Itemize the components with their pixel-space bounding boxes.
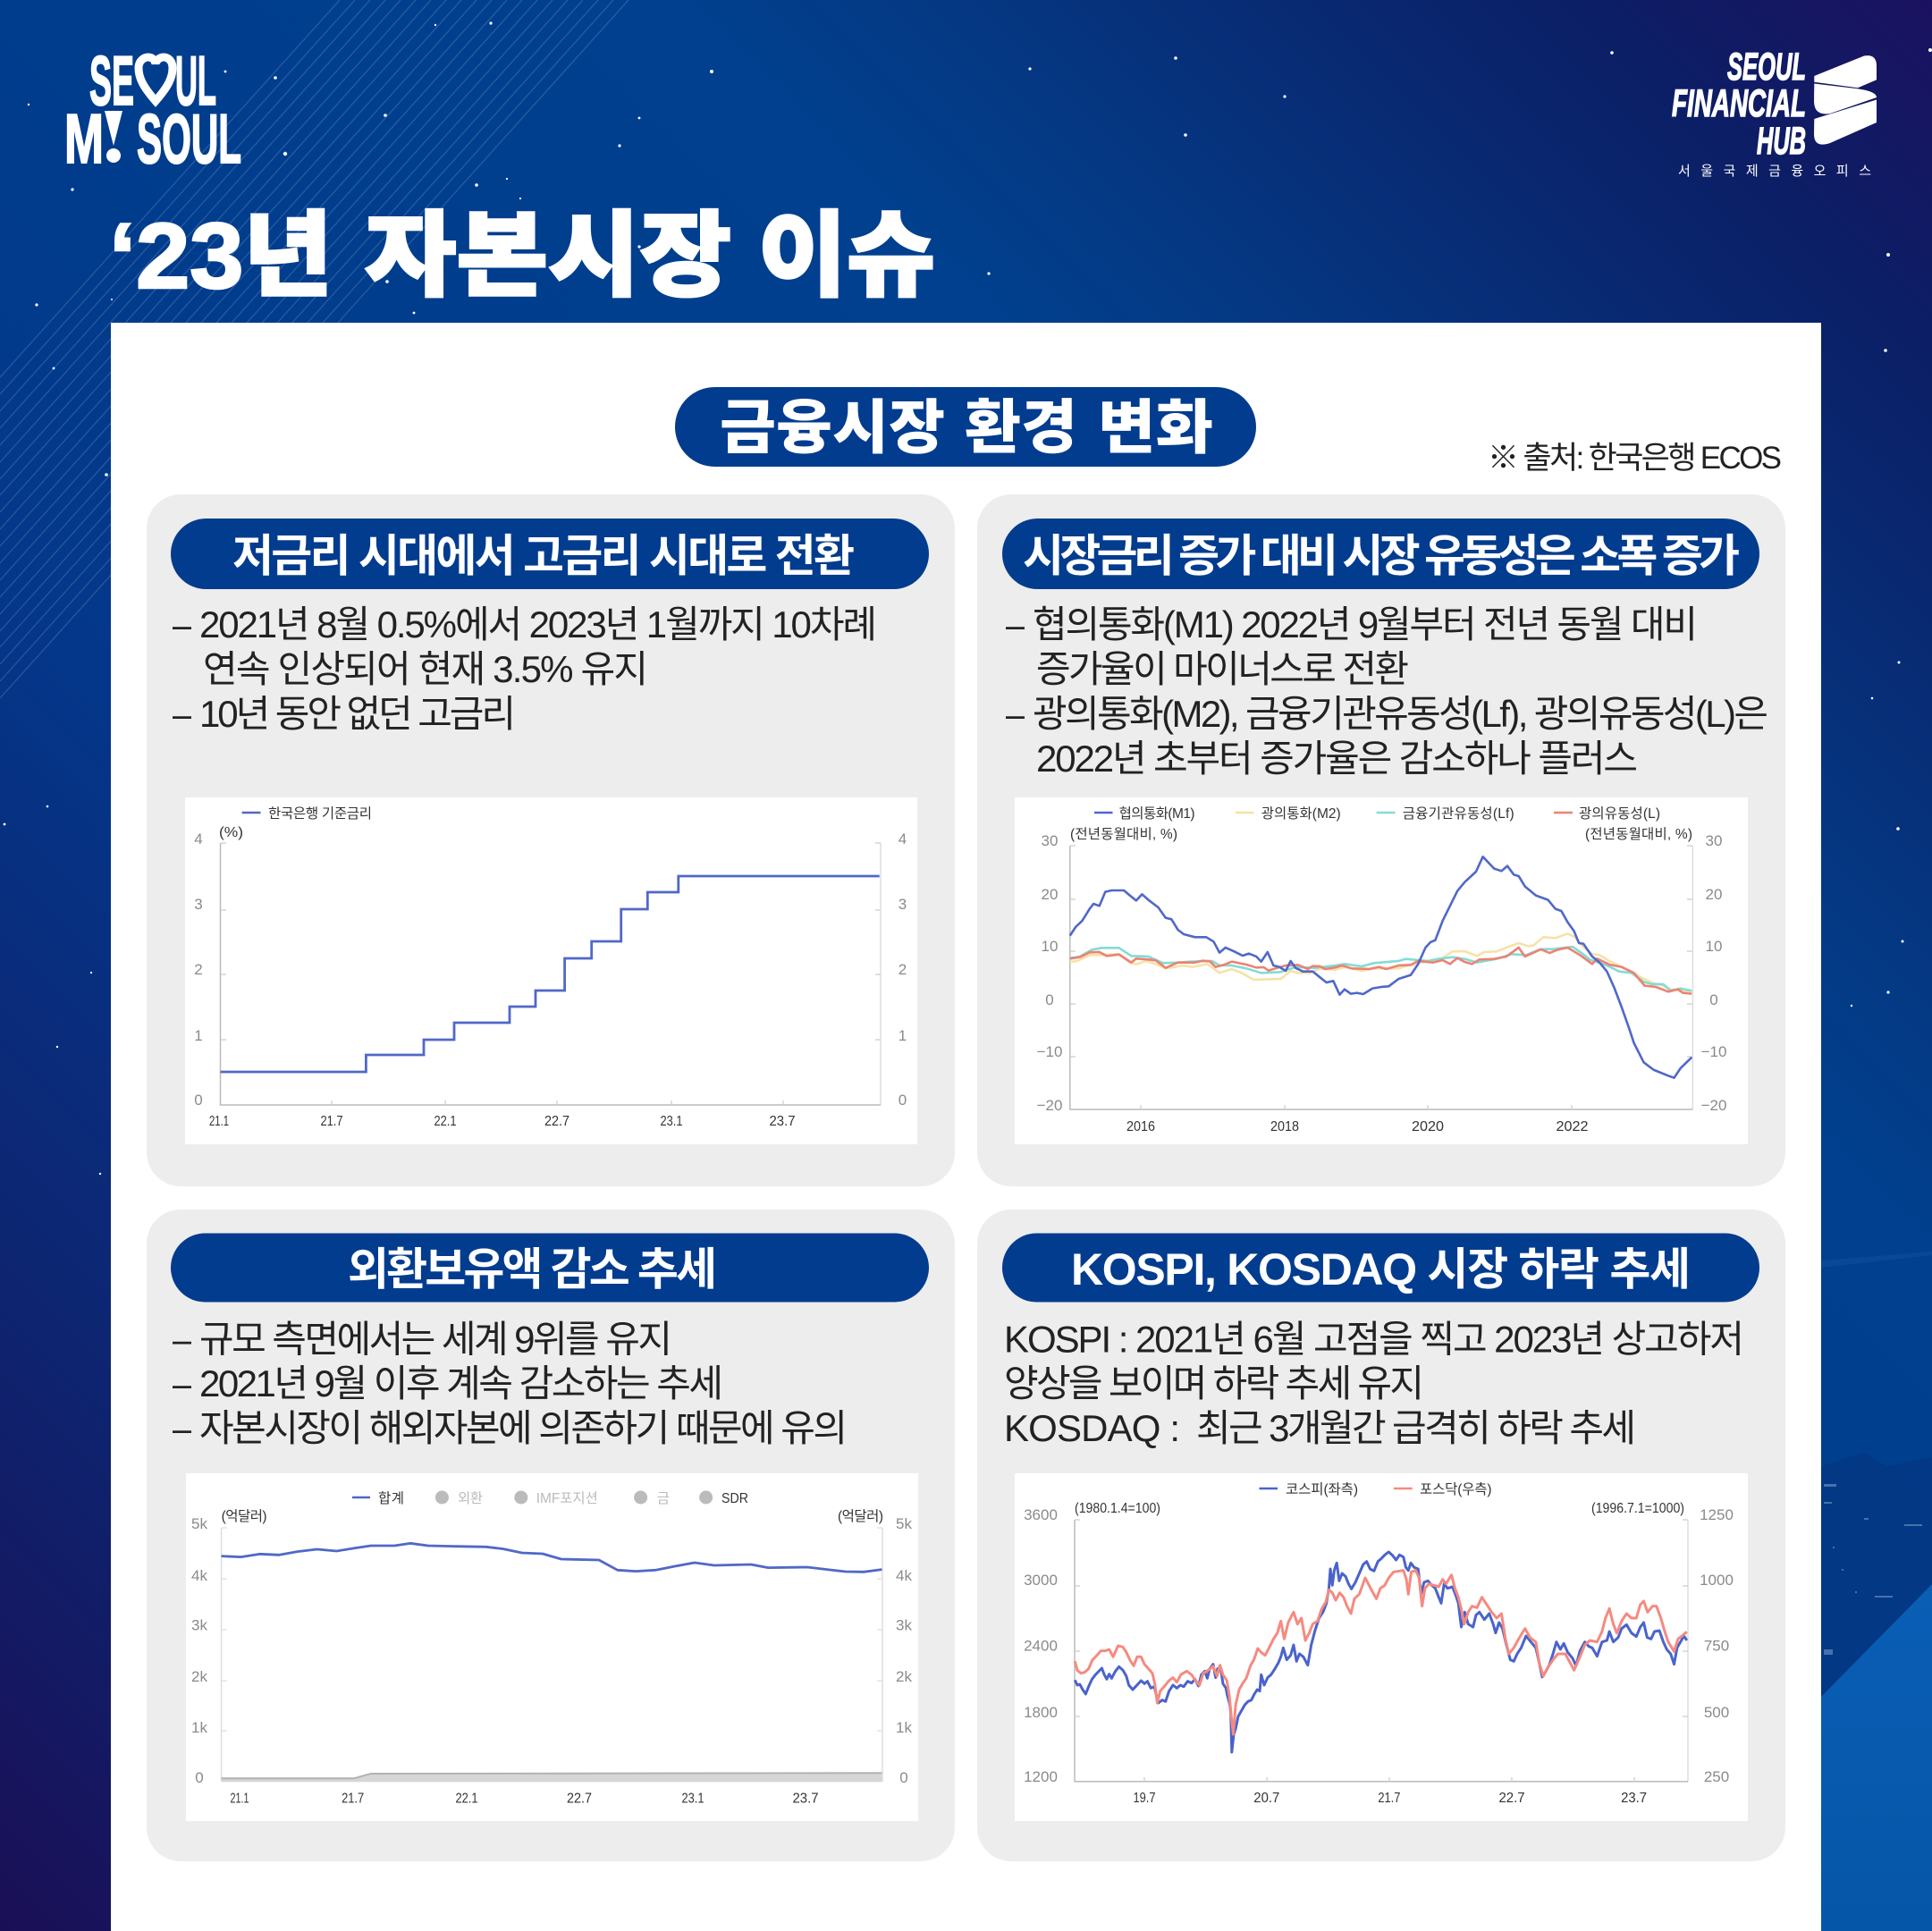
panel text: 양상을 보이며 하락 추세 유지 <box>1004 1362 1424 1404</box>
legend: 한국은행 기준금리 <box>268 805 372 822</box>
panel text <box>173 1318 848 1449</box>
logo: Seoul Financial Hub <box>1672 46 1877 179</box>
panel text <box>1004 1318 1744 1449</box>
legend: 금융기관유동성(Lf) <box>1403 805 1514 822</box>
panel: foreign reserves <box>147 1210 955 1861</box>
panel text: 연속 인상되어 현재 3.5% 유지 <box>203 648 648 690</box>
logo: Seoul Financial Hub: FINANCIAL <box>1672 82 1806 125</box>
chart: reserves: 5k <box>896 1515 912 1532</box>
panel text: – <box>1006 603 1025 645</box>
section heading pill: 환경 <box>965 394 1077 460</box>
section heading pill <box>675 387 1256 467</box>
chart: base rate: 4 <box>194 831 203 847</box>
chart: base rate <box>185 797 917 1144</box>
chart: stock indices: 1000 <box>1700 1572 1734 1589</box>
panel: KOSPI KOSDAQ <box>977 1210 1785 1861</box>
panel text: 증가율이 마이너스로 전환 <box>1036 648 1409 690</box>
chart: reserves: (억달러) <box>222 1508 267 1524</box>
chart: money supply growth: 2016 <box>1126 1119 1155 1134</box>
source note: ※ 출처: 한국은행 ECOS <box>1488 441 1782 476</box>
chart: base rate: 22.1 <box>434 1114 457 1129</box>
panel text: 광의통화(M2), 금융기관유동성(Lf), 광의유동성(L)은 <box>1033 693 1768 735</box>
legend: 코스피(좌측) <box>1286 1481 1358 1497</box>
chart: money supply growth: 10 <box>1706 938 1722 955</box>
chart: money supply growth: 2018 <box>1270 1119 1299 1134</box>
chart: stock indices: 1800 <box>1024 1704 1058 1721</box>
chart: stock indices <box>1015 1473 1748 1821</box>
chart: reserves: 23.1 <box>681 1792 704 1806</box>
chart: money supply growth: (전년동월대비, %) <box>1070 826 1177 842</box>
city night overlay <box>1821 1252 1932 1931</box>
chart: reserves: 2k <box>191 1668 207 1685</box>
chart: stock indices: 1250 <box>1700 1506 1734 1523</box>
chart: base rate: 3 <box>899 896 907 913</box>
chart: base rate: 23.7 <box>769 1114 796 1129</box>
panel text: 협의통화(M1) 2022년 9월부터 전년 동월 대비 <box>1033 603 1698 645</box>
legend: 외환 <box>458 1490 483 1506</box>
panel heading: 저금리 시대에서 고금리 시대로 전환 <box>232 531 855 581</box>
chart: base rate: 21.7 <box>320 1114 343 1129</box>
panel heading: 시장금리 증가 대비 시장 유동성은 소폭 증가 <box>1023 531 1740 581</box>
chart: stock indices: 21.7 <box>1378 1791 1400 1806</box>
chart: stock indices: 500 <box>1704 1704 1729 1721</box>
legend <box>1259 1481 1491 1497</box>
legend <box>352 1490 748 1506</box>
chart: money supply growth: (전년동월대비, %) <box>1585 826 1692 842</box>
chart: base rate: 1 <box>899 1027 907 1044</box>
panel text: 2021년 8월 0.5%에서 2023년 1월까지 10차례 <box>199 603 877 645</box>
legend: 금 <box>657 1491 670 1506</box>
panel text: 규모 측면에서는 세계 9위를 유지 <box>199 1318 672 1361</box>
legend: 협의통화(M1) <box>1119 805 1195 822</box>
chart: stock indices: 20.7 <box>1253 1791 1279 1806</box>
panel text: KOSPI : 2021년 6월 고점을 찍고 2023년 상고하저 <box>1004 1318 1744 1361</box>
chart: money supply growth: 10 <box>1042 938 1058 955</box>
title: 자본시장 <box>365 205 731 308</box>
chart: money supply growth: −20 <box>1701 1097 1726 1114</box>
panel: market liquidity <box>977 494 1785 1186</box>
chart: reserves: 21.1 <box>231 1792 249 1806</box>
panel text: – <box>173 1362 192 1404</box>
chart: stock indices: (1996.7.1=1000) <box>1591 1501 1684 1516</box>
legend <box>1094 805 1660 822</box>
logo: Seoul Financial Hub: HUB <box>1757 120 1806 163</box>
chart: reserves: 21.7 <box>342 1792 364 1806</box>
chart: reserves: 5k <box>191 1515 207 1532</box>
chart: stock indices: (1980.1.4=100) <box>1075 1501 1160 1516</box>
chart: reserves: 4k <box>191 1567 207 1584</box>
chart: reserves: 1k <box>896 1719 912 1736</box>
chart: reserves: (억달러) <box>838 1508 883 1524</box>
chart: reserves: 4k <box>896 1567 912 1584</box>
chart: base rate: 2 <box>899 961 907 978</box>
panel text: 자본시장이 해외자본에 의존하기 때문에 유의 <box>199 1407 848 1449</box>
logo: Seoul My Soul: SE <box>89 41 134 120</box>
chart: base rate: 4 <box>899 831 907 847</box>
panel text: – <box>1006 693 1025 735</box>
chart: stock indices: 1200 <box>1024 1768 1058 1785</box>
panel text <box>1006 603 1768 780</box>
chart: reserves: 0 <box>195 1769 204 1786</box>
chart: reserves: 0 <box>899 1769 908 1786</box>
legend: 합계 <box>378 1490 404 1506</box>
data lines <box>1075 1552 1687 1752</box>
chart: money supply growth: 20 <box>1042 886 1058 903</box>
panel text: KOSDAQ : <box>1004 1407 1180 1449</box>
panel heading <box>1002 519 1759 589</box>
white content panel <box>111 323 1821 1931</box>
panel heading: 외환보유액 감소 추세 <box>348 1244 717 1294</box>
panel heading <box>1002 1234 1759 1302</box>
chart: money supply growth <box>1015 797 1748 1144</box>
chart: base rate: 2 <box>194 961 203 978</box>
chart: base rate: 22.7 <box>544 1114 569 1129</box>
chart: money supply growth: 30 <box>1706 832 1722 849</box>
logo: Seoul My Soul: UL <box>175 41 216 120</box>
data series <box>222 1543 882 1782</box>
chart: base rate: 0 <box>899 1092 907 1109</box>
chart: reserves: 22.1 <box>456 1792 478 1806</box>
panel text: – <box>173 1407 192 1449</box>
section heading pill: 금융시장 <box>720 394 945 460</box>
panel: base rate <box>147 494 955 1186</box>
chart: stock indices: 2400 <box>1024 1638 1058 1655</box>
chart: stock indices: 3600 <box>1024 1506 1058 1523</box>
chart: money supply growth: 30 <box>1042 832 1058 849</box>
chart: money supply growth: 0 <box>1045 991 1054 1008</box>
panel text: 2022년 초부터 증가율은 감소하나 플러스 <box>1036 738 1638 780</box>
panel text: – <box>173 603 192 645</box>
logo: Seoul Financial Hub: SEOUL <box>1727 46 1806 89</box>
logo: Seoul Financial Hub: 서울국제금융오피스 <box>1678 164 1871 179</box>
diagonal hatch pattern <box>0 0 629 698</box>
chart: reserves: 3k <box>191 1616 207 1634</box>
legend: SDR <box>721 1491 748 1506</box>
chart: reserves: 22.7 <box>567 1792 592 1806</box>
chart: money supply growth: 0 <box>1709 991 1718 1008</box>
chart: reserves: 3k <box>896 1616 912 1634</box>
chart: money supply growth: −10 <box>1037 1043 1062 1060</box>
chart: base rate: (%) <box>219 825 243 840</box>
title: 이슈 <box>758 205 935 308</box>
chart: stock indices: 19.7 <box>1134 1791 1156 1806</box>
chart: stock indices: 750 <box>1704 1638 1729 1655</box>
chart: stock indices: 23.7 <box>1621 1791 1647 1806</box>
logo: Seoul My Soul <box>64 41 241 178</box>
section heading pill: 변화 <box>1098 394 1213 460</box>
chart: stock indices: 250 <box>1704 1768 1729 1785</box>
legend: 광의통화(M2) <box>1261 805 1341 822</box>
chart: reserves: 1k <box>191 1719 207 1736</box>
chart: money supply growth: 2022 <box>1556 1119 1589 1134</box>
chart: base rate: 23.1 <box>660 1114 683 1129</box>
panel text: 최근 3개월간 급격히 하락 추세 <box>1196 1407 1636 1449</box>
panel heading <box>171 1234 929 1302</box>
chart: stock indices: 22.7 <box>1498 1791 1525 1806</box>
legend: IMF포지션 <box>536 1490 598 1506</box>
chart: stock indices: 3000 <box>1024 1572 1058 1589</box>
chart: reserves <box>186 1473 918 1821</box>
title <box>109 205 935 308</box>
logo: Seoul My Soul: M <box>64 99 104 178</box>
logo: Seoul My Soul: SOUL <box>137 99 241 178</box>
chart: base rate: 1 <box>194 1027 203 1044</box>
panel heading <box>171 519 929 589</box>
title: ‘23년 <box>109 205 333 308</box>
panel text: 2021년 9월 이후 계속 감소하는 추세 <box>199 1362 723 1404</box>
chart: money supply growth: 2020 <box>1412 1119 1444 1134</box>
chart: money supply growth: 20 <box>1706 886 1722 903</box>
panel text: – <box>173 693 192 735</box>
legend: 광의유동성(L) <box>1579 805 1660 822</box>
chart: reserves: 2k <box>896 1668 912 1685</box>
chart: base rate: 3 <box>194 896 203 913</box>
chart: money supply growth: −20 <box>1037 1097 1062 1114</box>
stars <box>4 21 1932 1175</box>
panel text <box>173 603 877 735</box>
chart: money supply growth: −10 <box>1701 1043 1726 1060</box>
panel text: – <box>173 1318 192 1361</box>
chart: base rate: 0 <box>194 1092 203 1109</box>
chart: reserves: 23.7 <box>792 1792 819 1806</box>
panel text: 10년 동안 없던 고금리 <box>199 693 516 735</box>
data lines <box>1070 856 1692 1078</box>
legend: 포스닥(우측) <box>1420 1481 1491 1497</box>
panel heading: KOSPI, KOSDAQ 시장 하락 추세 <box>1071 1244 1691 1294</box>
chart: base rate: 21.1 <box>209 1114 229 1129</box>
